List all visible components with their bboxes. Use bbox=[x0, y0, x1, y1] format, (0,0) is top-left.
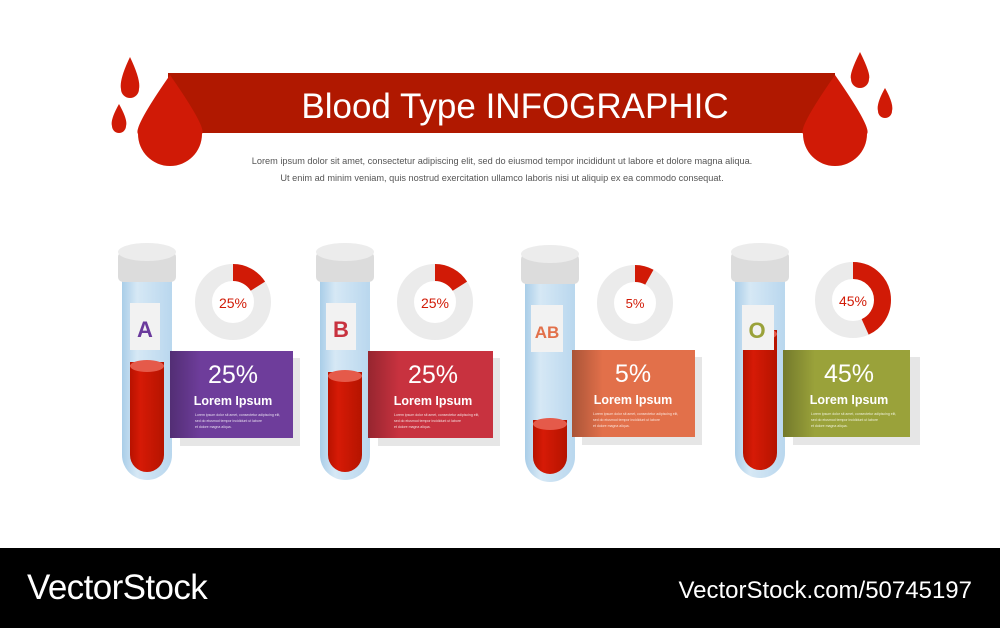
donut O: 45% bbox=[839, 293, 867, 309]
card B: Lorem Ipsum bbox=[394, 394, 472, 408]
card A bbox=[170, 351, 300, 446]
test tube O: O bbox=[748, 318, 766, 343]
card B: 25% bbox=[408, 361, 458, 389]
title: Blood Type INFOGRAPHIC bbox=[301, 87, 729, 126]
card AB: et dolore magna aliqua. bbox=[593, 424, 630, 428]
card A: Lorem ipsum dolor sit amet, consectetur adipiscing elit, bbox=[195, 413, 280, 417]
card B bbox=[368, 351, 500, 446]
test tube O bbox=[731, 243, 789, 478]
test tube A: A bbox=[137, 317, 153, 342]
panel: type B bbox=[316, 243, 500, 480]
subtitle text: Lorem ipsum dolor sit amet, consectetur adipiscing elit, sed do eiusmod tempor incididunt ut labore et dolore magna aliqua. bbox=[252, 156, 752, 166]
card O: Lorem Ipsum bbox=[810, 393, 888, 407]
title banner bbox=[168, 73, 835, 133]
card O: 45% bbox=[824, 360, 874, 388]
test tube B: B bbox=[333, 317, 349, 342]
card AB: Lorem Ipsum bbox=[594, 393, 672, 407]
card AB bbox=[572, 350, 702, 445]
footer url: VectorStock.com/50745197 bbox=[678, 577, 972, 604]
card A: et dolore magna aliqua. bbox=[195, 425, 232, 429]
test tube AB bbox=[521, 245, 579, 482]
test tube AB: AB bbox=[535, 323, 559, 342]
card A: sed do eiusmod tempor incididunt ut labore bbox=[195, 419, 262, 423]
card A: 25% bbox=[208, 361, 258, 389]
card AB: sed do eiusmod tempor incididunt ut labore bbox=[593, 418, 660, 422]
card A: Lorem Ipsum bbox=[194, 394, 272, 408]
card O: Lorem ipsum dolor sit amet, consectetur adipiscing elit, bbox=[811, 412, 896, 416]
icon: blood drops right bbox=[802, 52, 892, 166]
donut B: 25% bbox=[421, 295, 449, 311]
donut AB bbox=[606, 274, 664, 332]
subtitle text: Ut enim ad minim veniam, quis nostrud exercitation ullamco laboris nisi ut aliquip ex ea commodo consequat. bbox=[280, 173, 724, 183]
panel: type A bbox=[118, 243, 300, 480]
card O: et dolore magna aliqua. bbox=[811, 424, 848, 428]
card O: sed do eiusmod tempor incididunt ut labore bbox=[811, 418, 878, 422]
card O bbox=[783, 350, 920, 445]
footer logo: VectorStock bbox=[27, 568, 208, 607]
panel: type O bbox=[731, 243, 920, 478]
test tube A bbox=[118, 243, 176, 480]
card B: et dolore magna aliqua. bbox=[394, 425, 431, 429]
card B: sed do eiusmod tempor incididunt ut labore bbox=[394, 419, 461, 423]
donut A bbox=[204, 272, 262, 332]
subtitle text bbox=[252, 156, 752, 183]
card AB: Lorem ipsum dolor sit amet, consectetur adipiscing elit, bbox=[593, 412, 678, 416]
icon: blood drops left bbox=[112, 57, 203, 166]
card AB: 5% bbox=[615, 360, 651, 388]
test tube B bbox=[316, 243, 374, 480]
footer bar bbox=[0, 548, 1000, 628]
donut O bbox=[824, 270, 882, 330]
donut AB: 5% bbox=[626, 296, 645, 311]
donut B bbox=[406, 272, 464, 332]
panel: type AB bbox=[521, 245, 702, 482]
donut A: 25% bbox=[219, 295, 247, 311]
card B: Lorem ipsum dolor sit amet, consectetur adipiscing elit, bbox=[394, 413, 479, 417]
